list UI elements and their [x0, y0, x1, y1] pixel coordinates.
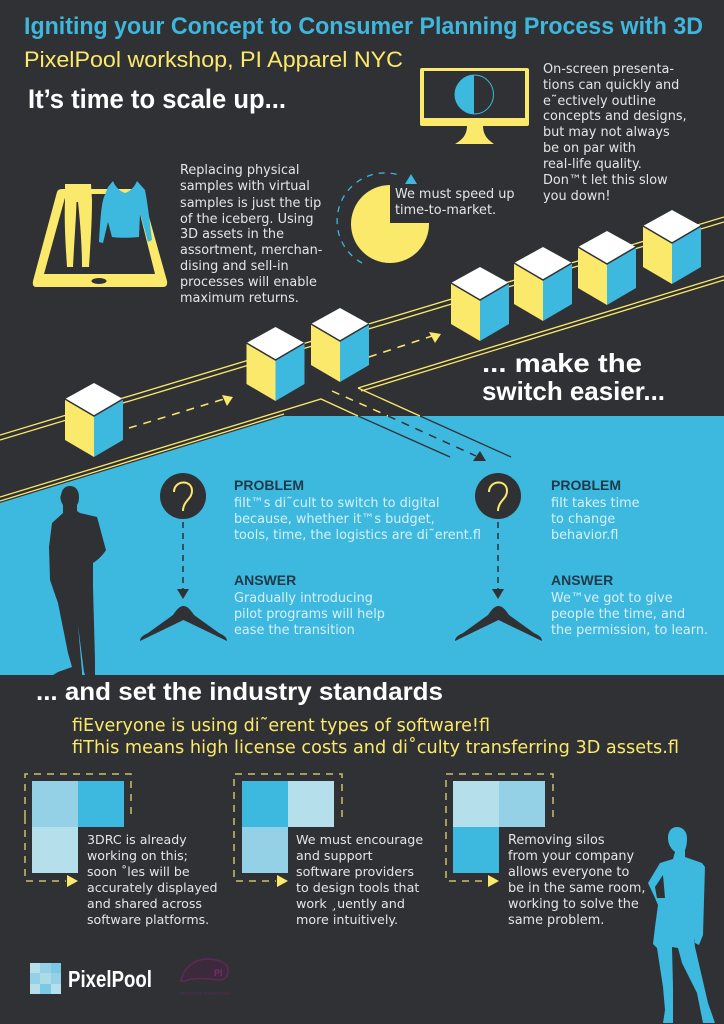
icon: question circle right: [475, 473, 521, 519]
logo: PI: PRODUCT INNOVATION: [180, 991, 231, 996]
text: problem two: fiIt takes time: [551, 496, 640, 511]
logo: PixelPool: [30, 963, 152, 994]
text: speed up: [395, 187, 515, 218]
text: card three: working to solve the: [508, 897, 639, 912]
text: on-screen presentations: tions can quickly and: [543, 78, 679, 93]
dashed arrow right: [492, 522, 504, 599]
heading: industry standards: ... and set the industry standards: [36, 678, 443, 706]
text: problem two: PROBLEM: [551, 477, 621, 493]
text: replacing physical samples: processes will enable: [180, 275, 317, 290]
text: card two: work ¸uently and: [296, 896, 405, 911]
text: card three: [508, 833, 645, 928]
text: problem one: because, whether it™s budget,: [234, 512, 435, 527]
logo: PixelPool: PixelPool: [68, 966, 152, 992]
text: card one: soon ˚les will be: [87, 864, 190, 879]
quotes: software: fiThis means high license costs and di˚culty transferring 3D assets.fl: [72, 737, 679, 758]
text: on-screen presentations: concepts and designs,: [543, 109, 687, 124]
text: answer two: the permission, to learn.: [551, 623, 708, 638]
text: on-screen presentations: real-life quality.: [543, 157, 642, 172]
quotes: software: fiEveryone is using di˜erent types of software!fl: [72, 716, 490, 736]
text: problem one: [234, 477, 481, 543]
text: card two: software providers: [296, 864, 414, 879]
text: card two: to design tools that: [296, 880, 419, 895]
text: card three: same problem.: [508, 913, 604, 928]
text: card one: and shared across: [87, 896, 202, 911]
text: on-screen presentations: On-screen presenta-: [543, 62, 674, 77]
icon: tablet with garments: [33, 181, 167, 287]
text: card three: Removing silos: [508, 833, 605, 848]
text: problem one: fiIt™s di˜cult to switch to digital: [234, 496, 440, 511]
heading: make the switch easier: [482, 348, 665, 406]
dashed arrow left: [177, 522, 189, 599]
text: replacing physical samples: assortment, merchan-: [180, 243, 322, 258]
text: answer two: ANSWER: [551, 572, 613, 588]
text: replacing physical samples: samples is just the tip: [180, 196, 321, 211]
text: replacing physical samples: dising and sell-in: [180, 259, 289, 274]
text: problem two: [551, 477, 640, 543]
text: on-screen presentations: Don™t let this slow: [543, 173, 668, 188]
text: problem two: behavior.fl: [551, 528, 618, 543]
text: card two: more intuitively.: [296, 912, 398, 927]
title: Igniting your Concept to Consumer Planning Process with 3D: [24, 13, 703, 40]
heading: scale up: It’s time to scale up...: [28, 84, 286, 114]
text: replacing physical samples: 3D assets in the: [180, 227, 284, 242]
text: answer one: ANSWER: [234, 572, 296, 588]
text: answer one: pilot programs will help: [234, 607, 385, 622]
icon: trousers: [65, 184, 92, 267]
text: on-screen presentations: [543, 62, 687, 204]
text: answer one: Gradually introducing: [234, 591, 373, 606]
icon: question circle left: [160, 473, 206, 519]
text: answer one: ease the transition: [234, 623, 355, 638]
text: card one: software platforms.: [87, 912, 209, 927]
text: answer one: [234, 572, 385, 638]
text: replacing physical samples: of the iceberg. Using: [180, 212, 314, 227]
text: speed up: We must speed up: [395, 187, 515, 202]
heading: make the switch easier: ... make the: [482, 348, 642, 378]
text: card one: 3DRC is already: [87, 832, 187, 847]
text: replacing physical samples: samples with virtual: [180, 179, 310, 194]
isometric cubes: [65, 210, 701, 457]
text: answer two: [551, 572, 708, 638]
silhouette: man: [49, 486, 106, 675]
dashed arrow: cube three to cube four: [369, 332, 441, 357]
text: on-screen presentations: e˜ectively outline: [543, 94, 656, 109]
text: on-screen presentations: but may not always: [543, 125, 670, 140]
silhouette: woman: [648, 827, 715, 1023]
icon: monitor: [420, 68, 529, 144]
text: answer two: We™ve got to give: [551, 591, 673, 606]
text: on-screen presentations: you down!: [543, 189, 610, 204]
text: speed up: time-to-market.: [395, 203, 496, 218]
text: card one: accurately displayed: [87, 880, 218, 895]
text: problem one: tools, time, the logistics are di˜erent.fl: [234, 528, 481, 543]
quotes: software: [72, 716, 679, 758]
text: card two: [296, 832, 423, 927]
text: card one: working on this;: [87, 848, 188, 863]
text: card two: We must encourage: [296, 832, 423, 847]
text: problem one: PROBLEM: [234, 477, 304, 493]
dashed arrow: down to blue section: [332, 391, 486, 461]
chart icon: pie with dashed arc: [337, 173, 429, 263]
text: replacing physical samples: [180, 163, 322, 306]
panel: blue switch section: [0, 416, 724, 675]
dashed arrow: cube one to cube two: [129, 395, 233, 428]
text: replacing physical samples: maximum returns.: [180, 291, 299, 306]
lower rail lines: [0, 276, 724, 501]
panel: card one: [25, 774, 218, 927]
logo: PI: [180, 959, 231, 996]
panel: card three: [446, 774, 645, 928]
text: on-screen presentations: be on par with: [543, 141, 636, 156]
text: problem two: to change: [551, 512, 615, 527]
icon: sweater: [99, 181, 152, 243]
upper rail lines: [0, 217, 724, 440]
text: card one: [87, 832, 218, 927]
logo: PI: PI: [214, 968, 223, 978]
text: replacing physical samples: Replacing physical: [180, 163, 300, 178]
icon: hanger right: [455, 606, 542, 641]
text: card three: from your company: [508, 849, 635, 864]
text: answer two: people the time, and: [551, 607, 685, 622]
subtitle: PixelPool workshop, PI Apparel NYC: [24, 47, 403, 72]
text: card three: be in the same room,: [508, 881, 645, 896]
heading: make the switch easier: switch easier...: [482, 376, 665, 406]
text: card three: allows everyone to: [508, 865, 629, 880]
text: card two: and support: [296, 848, 373, 863]
panel: card two: [234, 774, 423, 927]
icon: hanger left: [140, 606, 227, 641]
